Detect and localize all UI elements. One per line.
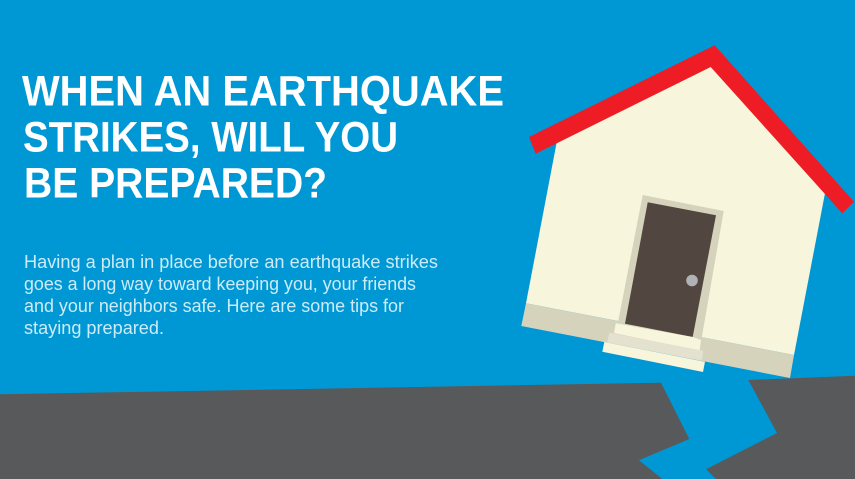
ground with crack <box>0 376 855 479</box>
door frame <box>618 195 724 338</box>
title: WHEN AN EARTHQUAKE <box>22 68 504 116</box>
intro text: and your neighbors safe. Here are some tips for <box>24 296 404 316</box>
intro text <box>24 252 438 338</box>
foundation band <box>521 303 794 378</box>
intro text: staying prepared. <box>24 318 164 338</box>
intro text: goes a long way toward keeping you, your friends <box>24 274 416 294</box>
roof <box>529 45 854 213</box>
title <box>22 68 504 208</box>
intro text: Having a plan in place before an earthquake strikes <box>24 252 438 272</box>
door knob <box>686 275 698 286</box>
front steps <box>602 323 705 372</box>
door <box>625 202 716 337</box>
house <box>521 45 854 378</box>
title: STRIKES, WILL YOU <box>23 114 398 162</box>
house wall <box>526 58 826 355</box>
title: BE PREPARED? <box>24 160 327 208</box>
